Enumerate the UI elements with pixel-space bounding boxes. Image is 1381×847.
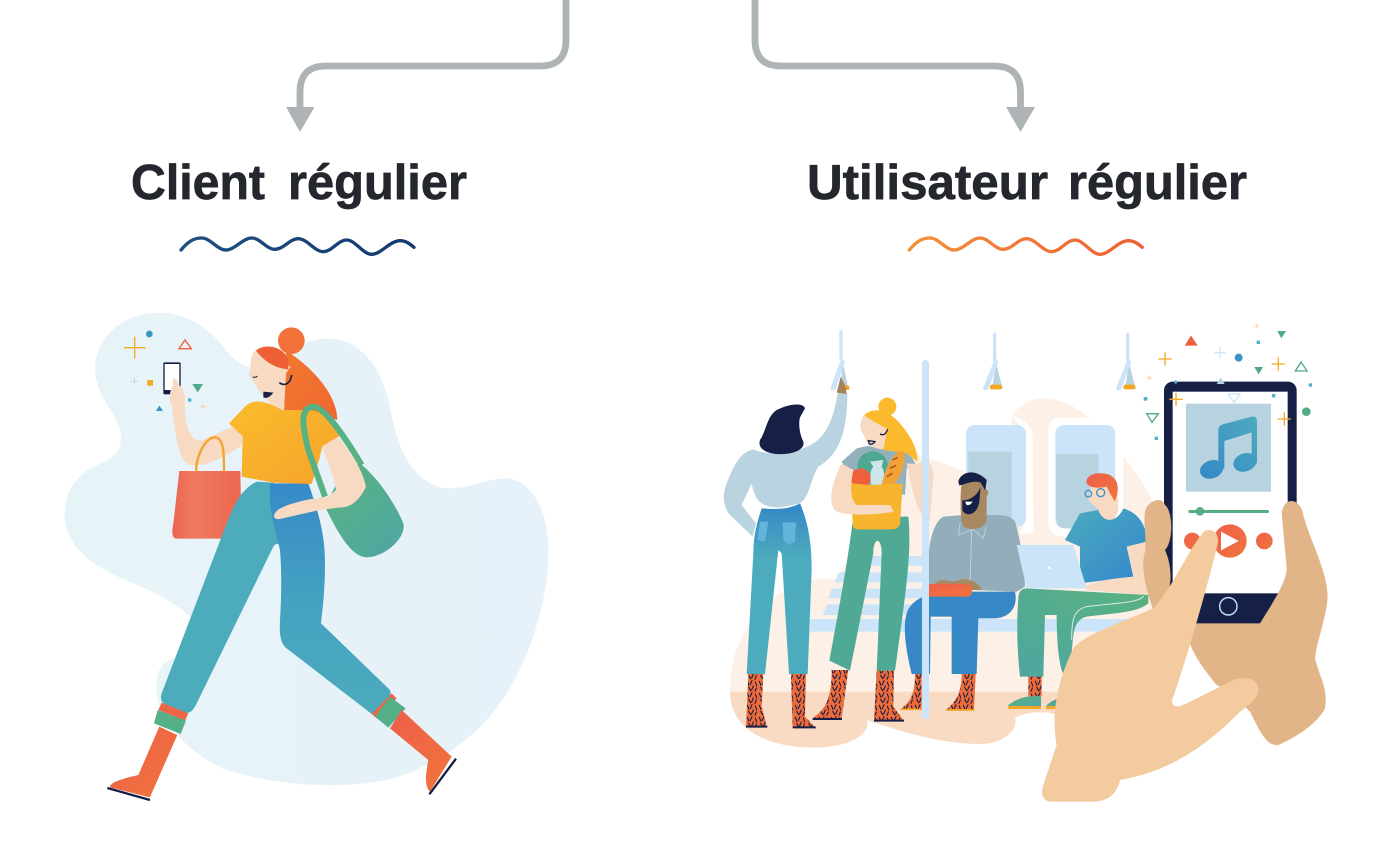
seated man with beard	[901, 472, 1025, 710]
hanging strap 1	[831, 330, 849, 390]
sparkle shapes	[1144, 323, 1312, 440]
hands	[934, 579, 982, 590]
right boot	[372, 693, 456, 794]
yellow t-shirt	[229, 401, 339, 484]
pockets	[757, 522, 796, 545]
right window	[1048, 418, 1123, 537]
floor	[730, 692, 1063, 748]
trousers	[1017, 588, 1148, 677]
red pouch	[923, 584, 972, 597]
music note	[1197, 417, 1259, 482]
illustration: hands holding music phone	[1042, 323, 1328, 802]
rear hand fingers	[1143, 500, 1171, 610]
head	[961, 480, 988, 529]
lower arm	[274, 437, 366, 519]
socks and shoes	[901, 674, 976, 710]
heading: Client régulier: Client	[131, 156, 265, 210]
hanging strap 2	[983, 333, 1003, 390]
shoulder bag	[325, 463, 404, 557]
trousers	[829, 517, 909, 671]
sweater	[724, 390, 847, 537]
phone	[1164, 377, 1297, 624]
arrow: left connector	[286, 0, 566, 132]
t-shirt	[1065, 508, 1147, 583]
sock and shoes	[1008, 676, 1063, 709]
rear hand	[1188, 501, 1328, 745]
trousers	[905, 592, 1016, 674]
hair and bun	[863, 398, 917, 462]
front leg trousers	[270, 483, 390, 714]
overlaid sparkles	[1169, 377, 1291, 426]
collar	[958, 523, 986, 583]
hair	[759, 404, 805, 454]
background blob	[65, 313, 548, 785]
hanging strap 3	[1116, 333, 1136, 390]
sparkle shapes	[124, 331, 206, 411]
raised arm	[172, 400, 243, 465]
face	[248, 350, 291, 411]
front hand	[1042, 530, 1258, 802]
eye and mouth	[868, 429, 888, 444]
heading: Client régulier	[131, 156, 467, 210]
player buttons	[1184, 524, 1273, 558]
woman with grocery bag	[813, 398, 933, 721]
progress slider	[1188, 507, 1269, 516]
left window	[966, 416, 1033, 533]
heading: Client régulier: régulier	[288, 156, 467, 210]
album art	[1186, 404, 1271, 492]
illustration: woman walking with phone	[65, 313, 548, 800]
head	[1088, 485, 1118, 520]
screen	[1173, 392, 1288, 593]
heading: Utilisateur régulier: régulier	[1068, 156, 1247, 210]
hair back	[284, 351, 337, 420]
beard and hair	[958, 472, 987, 514]
arrow: right connector	[755, 0, 1035, 132]
phone in hand	[163, 362, 185, 406]
bag handle	[196, 437, 224, 472]
face	[860, 415, 887, 449]
wavy underline: orange	[909, 238, 1142, 254]
hand on strap	[837, 377, 847, 394]
hand bag	[172, 471, 242, 539]
bench	[810, 556, 1150, 632]
home button	[1220, 598, 1237, 615]
fringe and bun	[256, 327, 305, 369]
woman standing from behind	[724, 377, 847, 727]
groceries	[851, 451, 905, 488]
rear leg trousers	[161, 482, 284, 713]
metro pole	[922, 360, 929, 719]
seated man with laptop	[1008, 473, 1149, 709]
jeans	[747, 503, 812, 674]
heading: Utilisateur régulier: Utilisateur	[807, 156, 1048, 210]
shirt	[928, 515, 1025, 592]
laptop	[1017, 545, 1087, 588]
arm	[1085, 542, 1149, 595]
wavy underline: navy	[181, 238, 414, 254]
glasses	[1085, 489, 1105, 497]
paper bag	[851, 483, 903, 529]
arms	[831, 461, 933, 520]
bag strap	[303, 407, 362, 497]
hair	[1087, 473, 1118, 502]
t-shirt	[842, 446, 916, 495]
trouser seam	[1072, 596, 1143, 640]
left boot	[107, 703, 188, 800]
illustration: metro passengers	[724, 330, 1160, 748]
facial details	[253, 375, 292, 398]
socks	[813, 670, 904, 721]
socks	[746, 673, 816, 727]
carriage background	[730, 398, 1160, 692]
heading: Utilisateur régulier	[807, 156, 1247, 210]
